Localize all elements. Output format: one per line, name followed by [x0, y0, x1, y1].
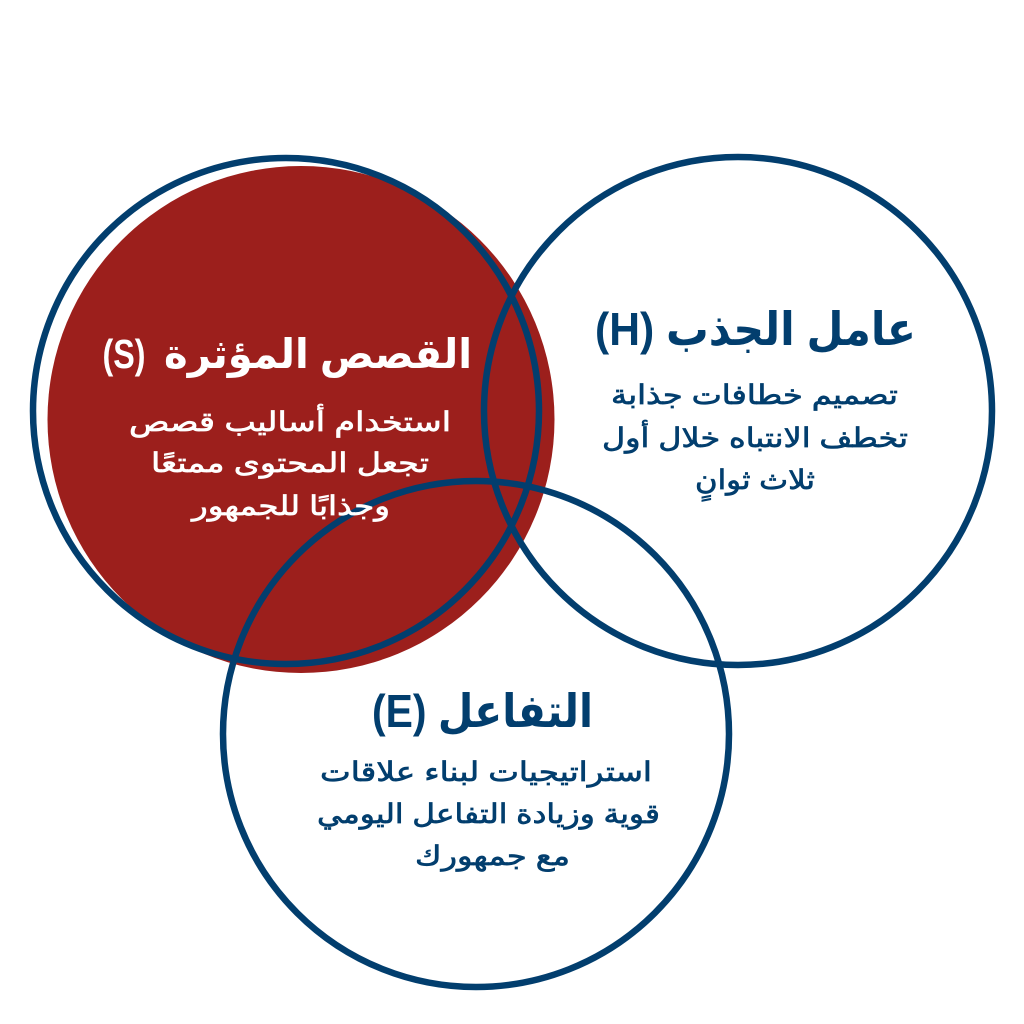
body text: S: وجذابًا للجمهور — [190, 491, 390, 522]
body text: H: ثلاث ثوانٍ — [695, 465, 815, 502]
circle outline: E — [223, 481, 729, 987]
panel: S text — [102, 331, 472, 522]
circle outline: H — [484, 157, 992, 665]
body text: S — [129, 403, 451, 522]
panel: E text — [317, 685, 660, 872]
panel: H text — [595, 303, 916, 502]
heading: S: القصص المؤثرة — [164, 331, 472, 378]
body text: E: مع جمهورك — [415, 841, 570, 872]
body text: E: استراتيجيات لبناء علاقات — [320, 757, 652, 788]
heading: S: (S) — [102, 331, 146, 377]
body text: H: تخطف الانتباه خلال أول — [602, 419, 908, 454]
body text: S: استخدام أساليب قصص — [129, 403, 451, 438]
body text: H — [602, 380, 908, 502]
body text: E: قوية وزيادة التفاعل اليومي — [317, 799, 660, 830]
body text: S: تجعل المحتوى ممتعًا — [151, 448, 429, 479]
body text: H: تصميم خطافات جذابة — [611, 380, 898, 411]
heading: E: التفاعل (E) — [372, 685, 593, 737]
circle outline: S — [33, 158, 539, 664]
body text: E — [317, 757, 660, 872]
red filled circle — [48, 166, 554, 673]
heading: H: عامل الجذب (H) — [595, 303, 916, 355]
